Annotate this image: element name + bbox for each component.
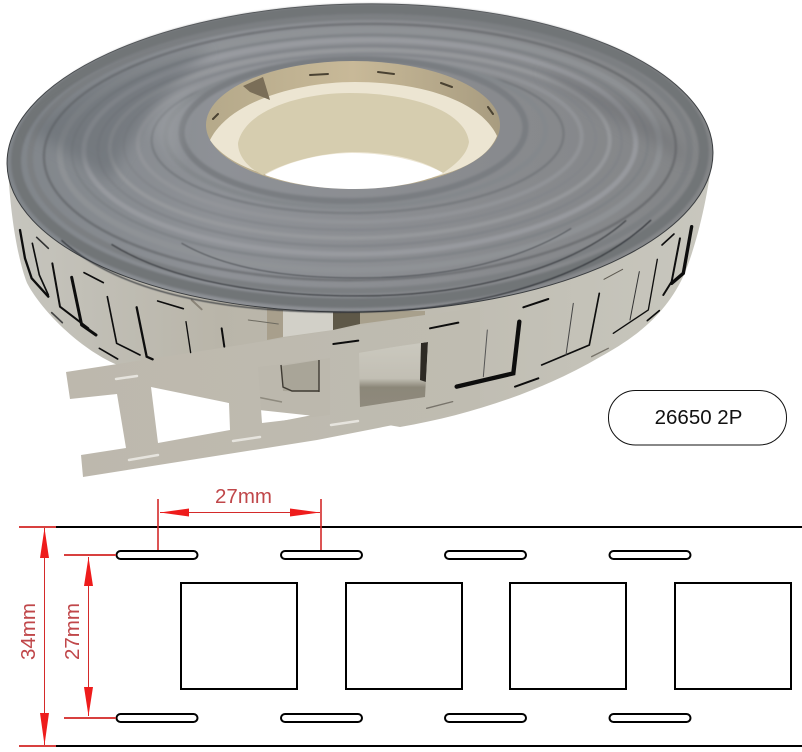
cell openings: [181, 583, 791, 689]
interior seen through the strip openings: [256, 341, 429, 425]
coil outer side band: [8, 150, 713, 427]
perforations on the coil side (left): [20, 230, 358, 359]
dark bottom streaks: [61, 220, 653, 317]
center hole: tan core: [238, 93, 469, 175]
loose strip unrolling in front: [66, 307, 480, 477]
top face shading on left and right: [30, 50, 690, 180]
center hole: gold inner wrap: [206, 61, 500, 189]
dimension: slot spacing 27mm: 27mm: [61, 603, 84, 660]
perforations on the coil side (right): [427, 227, 692, 408]
center hole: foam core: [210, 82, 497, 188]
dimension: slot pitch 27mm: [158, 485, 321, 550]
coil top face: [4, 0, 716, 318]
label: 26650 2P: 26650 2P: [655, 406, 742, 429]
bottom slots: [116, 714, 690, 722]
band region behind the strip: [267, 308, 425, 340]
photo: nickel strip coil: [4, 0, 716, 477]
dimension: strip width 34mm: [17, 527, 56, 746]
dimension: strip width 34mm: 34mm: [17, 603, 40, 660]
strip edges: [56, 527, 802, 746]
dimension: slot pitch 27mm: 27mm: [215, 485, 272, 508]
top slots: [116, 551, 690, 559]
strip slot highlights: [116, 376, 358, 460]
center hole: white opening: [265, 153, 443, 189]
dimension: slot spacing 27mm: [61, 555, 116, 718]
technical drawing of strip: [17, 485, 802, 746]
label: 26650 2P: [608, 390, 786, 445]
center hole: wrap detail: [213, 72, 493, 119]
wound layers: [13, 3, 706, 309]
